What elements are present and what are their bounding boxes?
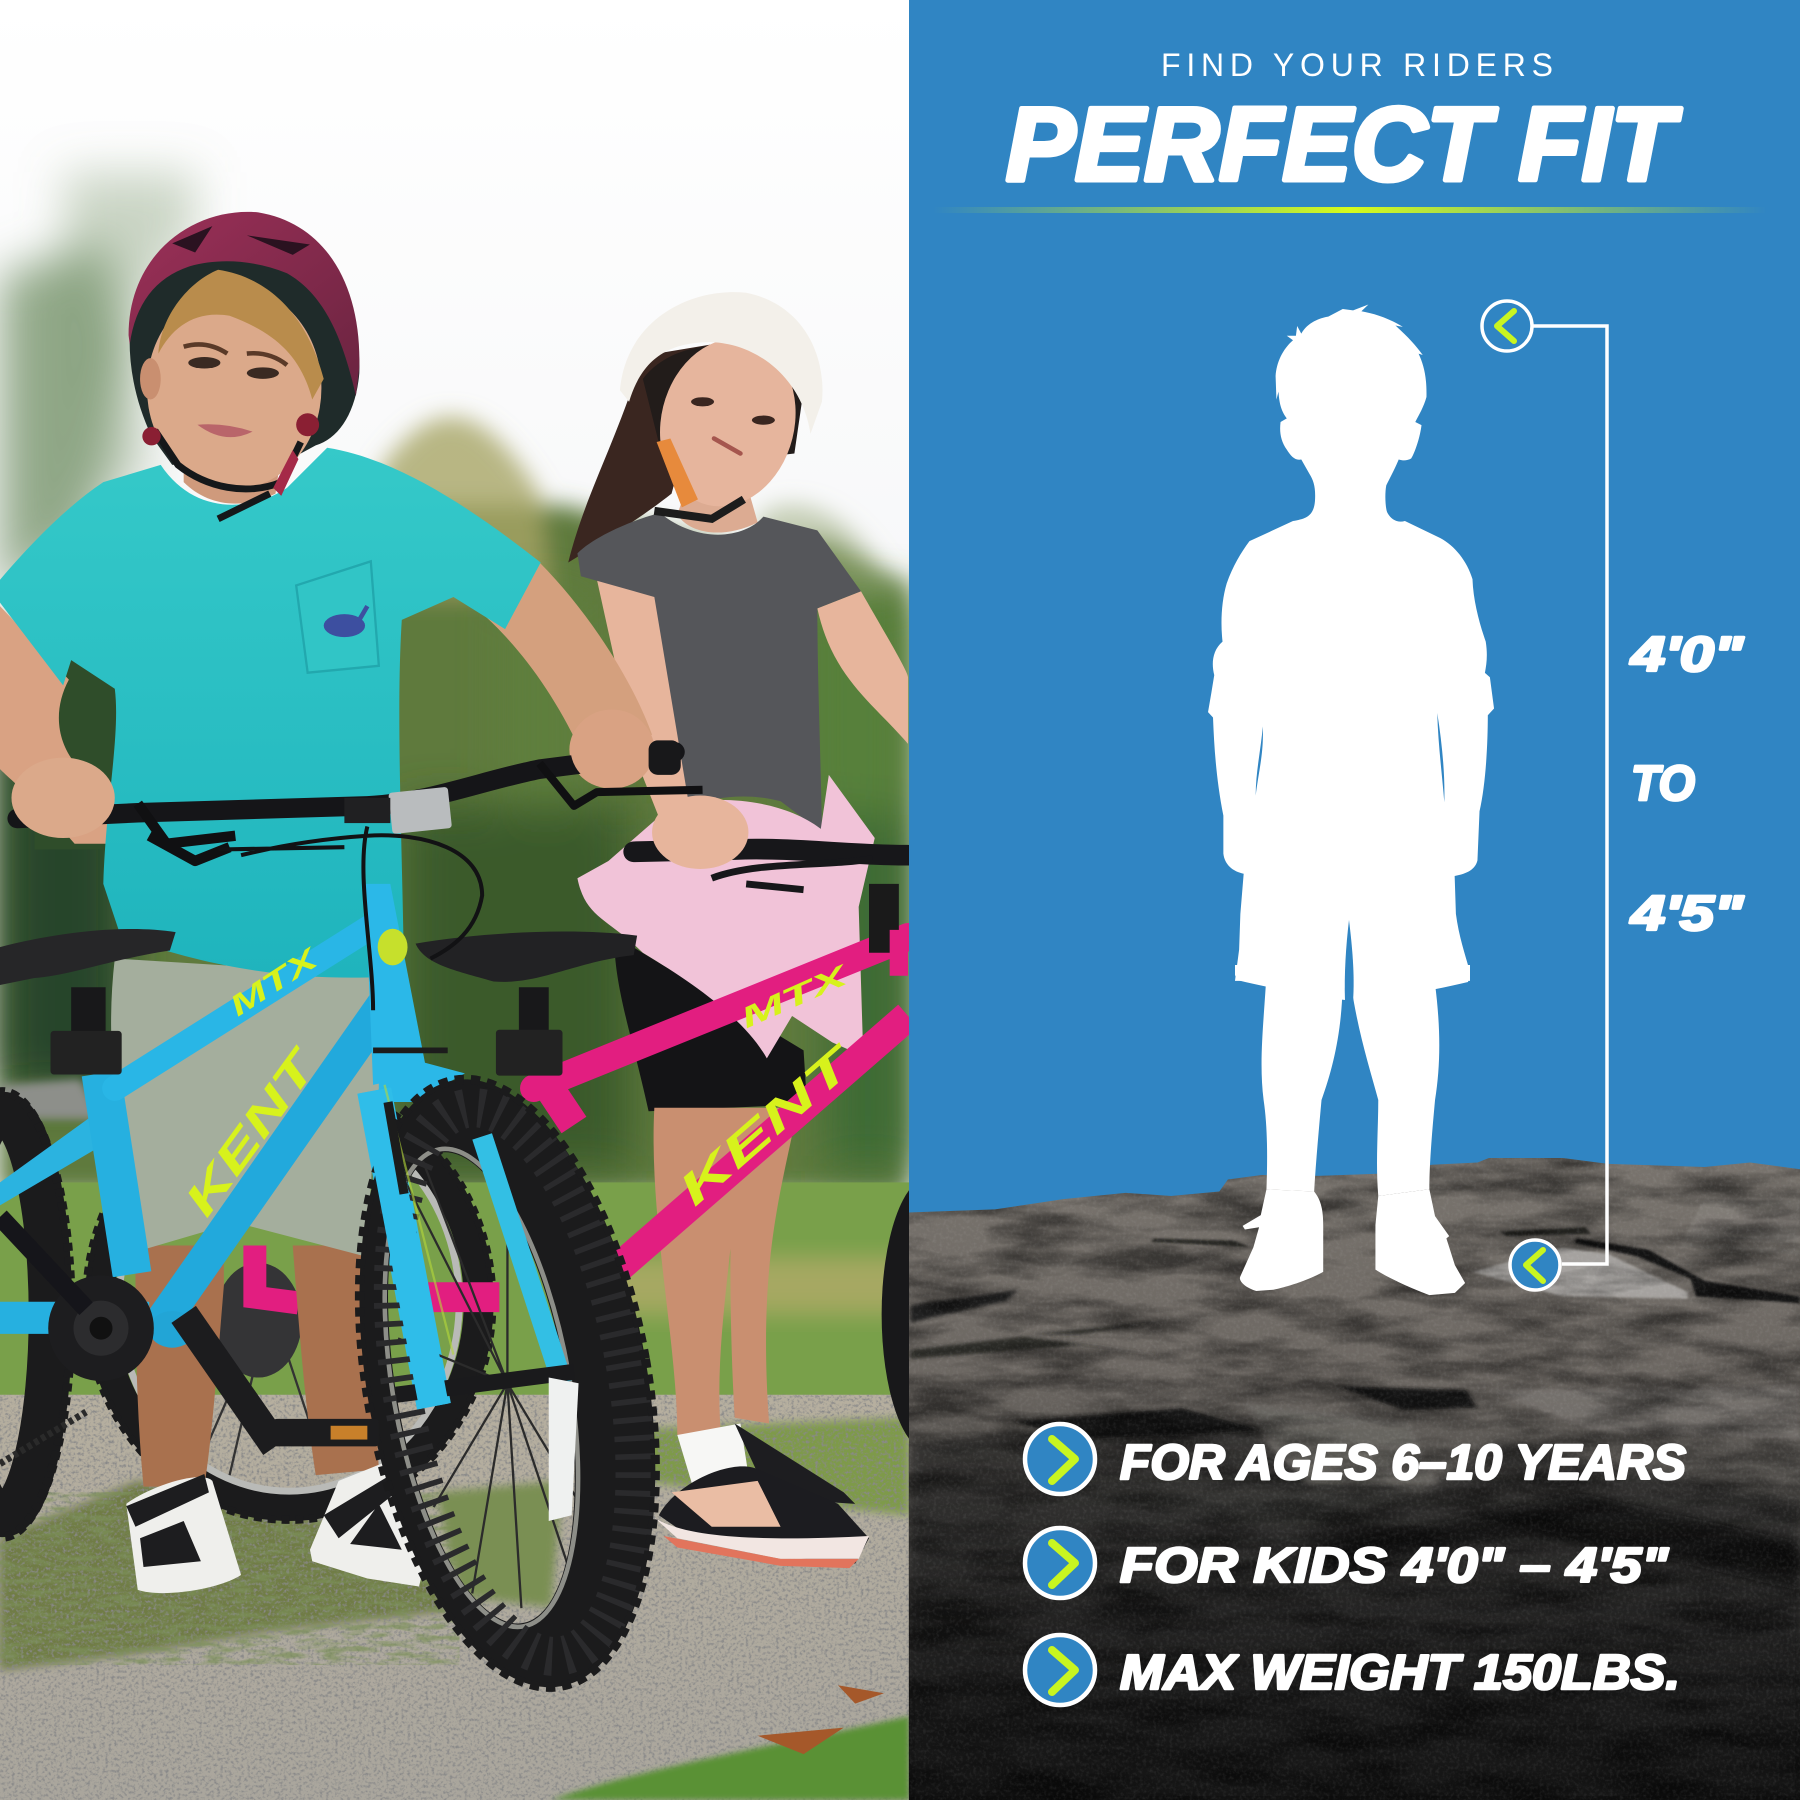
pink bike rear wheel — [86, 1084, 492, 1520]
helmet vents — [172, 226, 310, 255]
girl's pink jacket — [577, 775, 875, 1058]
pink bike MTX logo: MTX — [736, 959, 855, 1035]
blue bike seat and post — [0, 929, 176, 985]
blue bike rear wheel — [0, 1092, 71, 1537]
girl on the pink bike — [568, 292, 908, 1568]
helmet strap, orange pad — [657, 439, 698, 507]
chainring and crank — [0, 1217, 379, 1464]
icon: chevron bullet 3 — [1025, 1635, 1095, 1705]
girl's neck — [678, 498, 758, 532]
feature list — [1025, 1424, 1686, 1705]
girl's arms — [597, 580, 908, 829]
girl's black shorts — [614, 936, 807, 1111]
panel: blue sizing panel — [909, 0, 1800, 1800]
pink bike frame and handlebar — [255, 796, 978, 1452]
blue bike KENT logo: KENT — [176, 1039, 329, 1225]
measuring line — [1532, 326, 1607, 1264]
panel: photo of two kids on bikes — [0, 146, 909, 1800]
girl's white helmet — [620, 292, 823, 434]
silhouette shorts hem — [1235, 950, 1470, 1000]
boy's helmet inner lining — [130, 235, 359, 465]
shirt pocket with whale logo — [296, 561, 379, 673]
feature: ages: FOR AGES 6–10 YEARS — [1120, 1436, 1686, 1490]
chin strap — [155, 430, 301, 519]
boy's right arm — [476, 563, 652, 748]
brake cables — [218, 827, 482, 1010]
feature: weight: MAX WEIGHT 150LBS. — [1120, 1646, 1680, 1700]
front fork — [482, 1136, 563, 1383]
silhouette: standing child — [1208, 305, 1494, 1295]
blue bike MTX logo: MTX — [224, 941, 326, 1023]
boy's maroon helmet — [129, 212, 359, 396]
silhouette gap between shorts legs — [1345, 920, 1354, 1001]
pink bike front wheel edge — [882, 1177, 978, 1452]
boy's blond hair — [158, 270, 324, 399]
silhouette legs and shoes — [1240, 984, 1465, 1295]
divider: lime glow line — [933, 207, 1767, 213]
height label: 4'5": 4'5" — [1630, 887, 1744, 941]
boy on the blue bike — [0, 212, 654, 1593]
silhouette upper body — [1208, 305, 1494, 981]
photo ground: grass and gravel — [0, 1182, 909, 1800]
girl's legs — [654, 1108, 798, 1435]
pink bike handlebar — [634, 849, 908, 855]
blue bike front wheel — [316, 1056, 699, 1711]
icon: bottom height marker — [1510, 1240, 1560, 1290]
boy's left arm — [0, 606, 126, 844]
panel: rock ground — [909, 1100, 1800, 1800]
subtitle: FIND YOUR RIDERS: FIND YOUR RIDERS — [1161, 47, 1553, 83]
girl's face — [660, 342, 796, 506]
boy's turquoise shirt — [0, 448, 541, 978]
pink bike seat and post — [416, 932, 637, 982]
girl's sock and shoe — [654, 1423, 869, 1568]
head tube badge — [378, 929, 408, 965]
boy's legs — [135, 1246, 379, 1487]
height label: TO: TO — [1631, 757, 1695, 811]
girl's grey t-shirt — [577, 513, 861, 832]
photo background: sky and trees — [0, 146, 909, 1182]
girl's helmet inner lining — [643, 346, 804, 459]
feature: height: FOR KIDS 4'0" – 4'5" — [1120, 1539, 1669, 1593]
icon: chevron bullet 1 — [1025, 1424, 1095, 1494]
blue bike frame — [0, 709, 703, 1711]
height label: 4'0": 4'0" — [1630, 628, 1744, 682]
pink bike KENT logo: KENT — [670, 1036, 866, 1215]
icon: chevron bullet 2 — [1025, 1528, 1095, 1598]
rock shadows and slabs — [910, 1198, 1800, 1800]
boy's sage shorts — [111, 959, 390, 1257]
title: PERFECT FIT: PERFECT FIT — [1006, 87, 1681, 203]
girl's hair — [568, 344, 712, 563]
blue bike handlebar — [11, 709, 703, 861]
boy's sneakers — [126, 1460, 422, 1593]
boy's neck and face — [140, 287, 321, 504]
icon: top height marker — [1482, 301, 1532, 351]
